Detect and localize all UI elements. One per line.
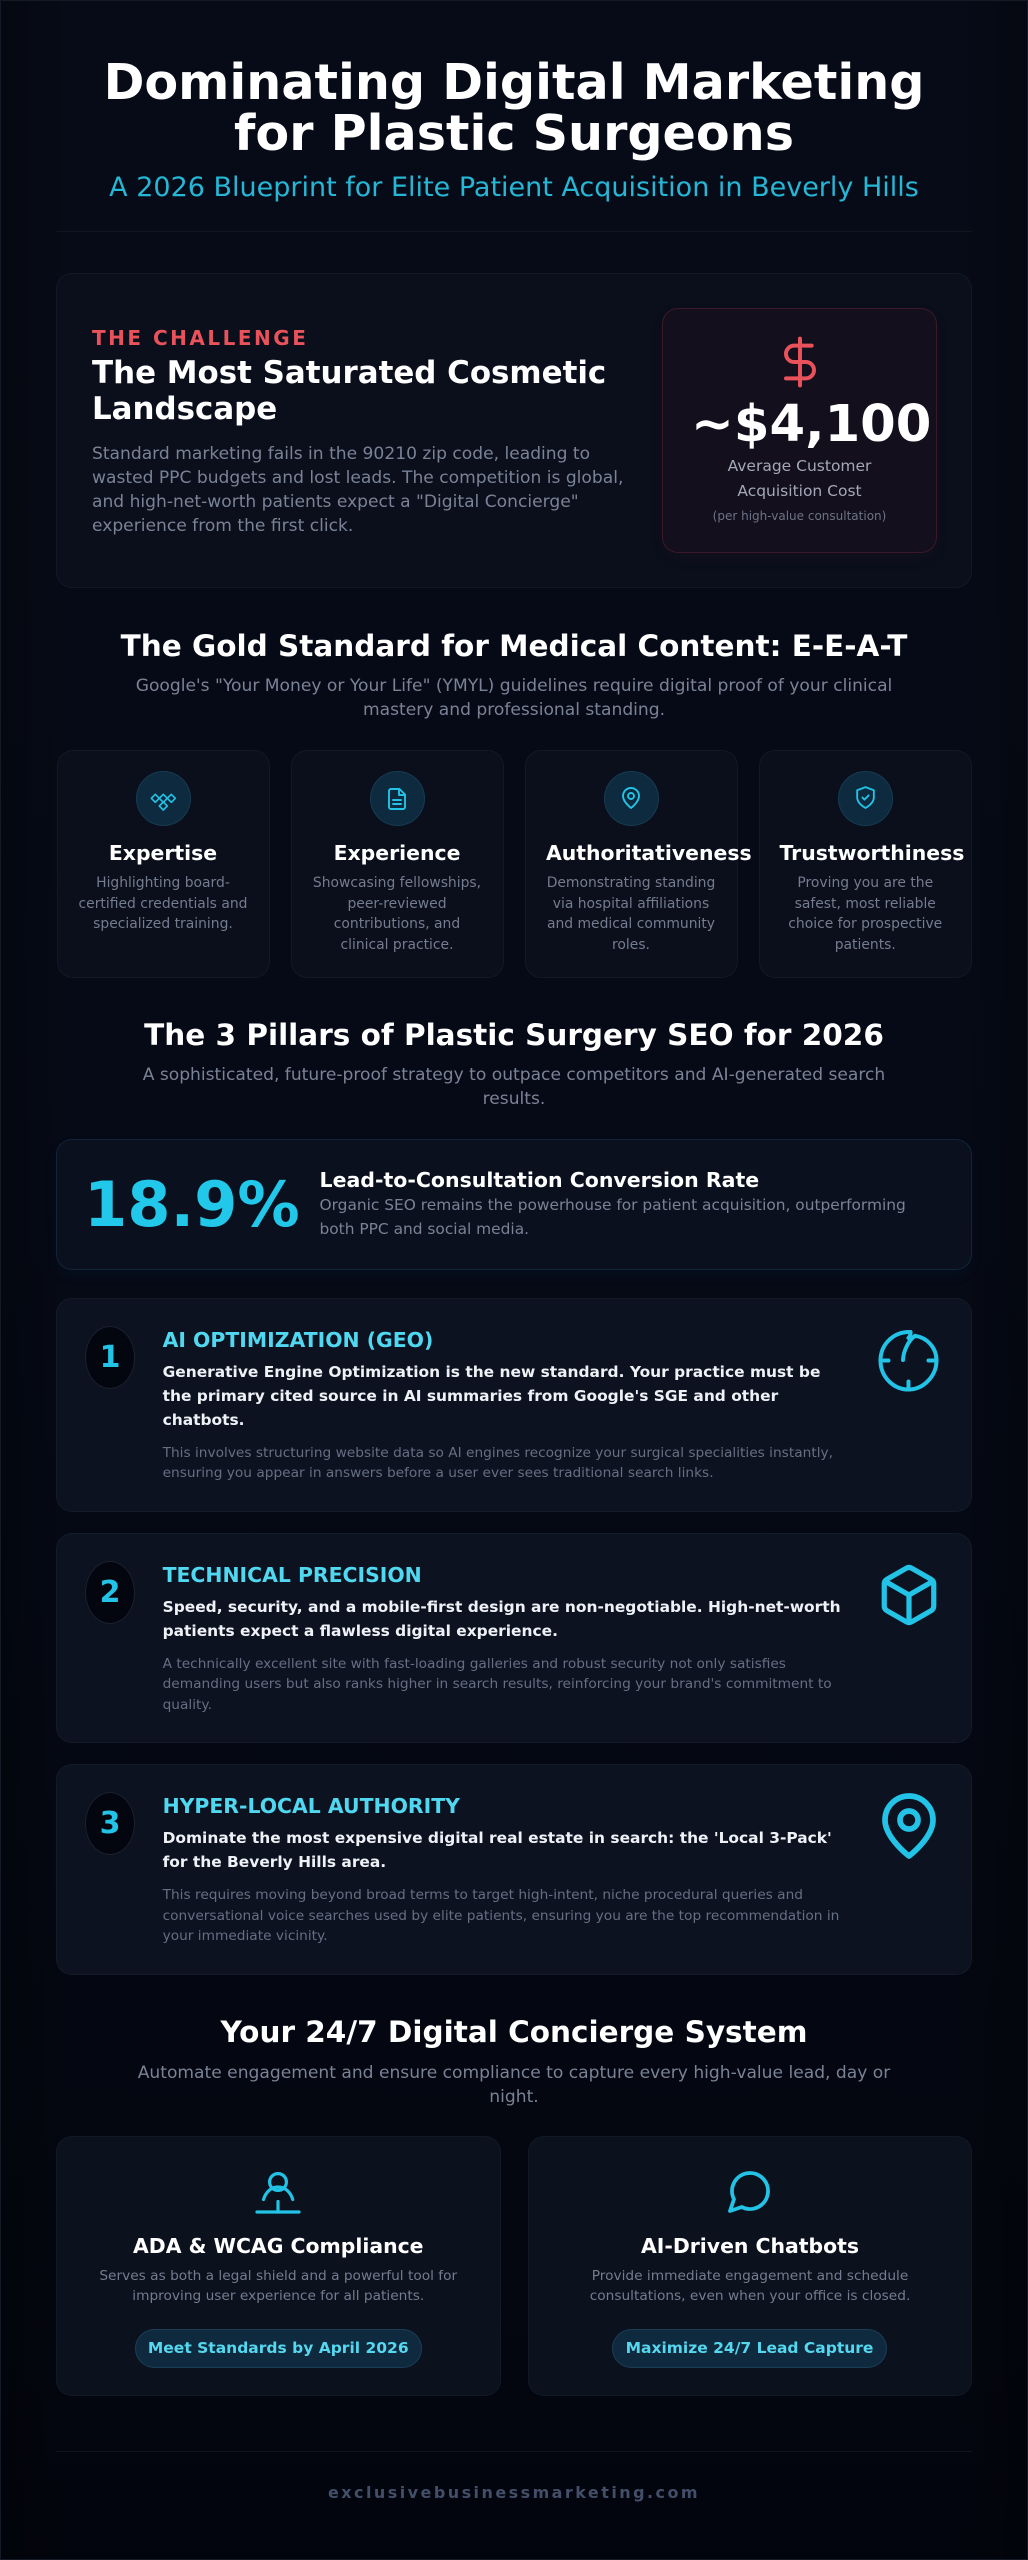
pillar detail: ensuring you appear in answers before a user ever sees traditional search links.	[163, 1465, 714, 1481]
pillar detail	[162, 1887, 839, 1944]
pillar lead	[162, 1363, 820, 1429]
stat label	[728, 457, 872, 500]
card text: safest, most reliable	[795, 896, 936, 912]
panel: ADA compliance	[56, 2136, 500, 2396]
icon: AI gauge	[878, 1330, 938, 1392]
icon: document	[370, 771, 424, 826]
pillar title: HYPER-LOCAL AUTHORITY	[163, 1794, 460, 1818]
subtitle: A 2026 Blueprint for Elite Patient Acquisition in Beverly Hills	[109, 172, 919, 203]
pillar detail	[162, 1444, 833, 1481]
stat note: (per high-value consultation)	[713, 509, 886, 523]
icon: chat bubble	[728, 2171, 770, 2213]
stat label: Acquisition Cost	[737, 482, 862, 500]
panel: authoritativeness	[524, 750, 738, 978]
panel: AI chatbots	[528, 2136, 972, 2396]
pillar lead: for the Beverly Hills area.	[163, 1853, 386, 1871]
icon: diamonds	[136, 771, 191, 826]
title: Dominating Digital Marketing	[104, 52, 924, 110]
pillar lead: the primary cited source in AI summaries from Google's SGE and other	[163, 1387, 778, 1405]
icon: dollar sign	[784, 336, 816, 388]
number badge	[85, 1326, 135, 1389]
panel: pillar 3	[56, 1764, 972, 1975]
pillar detail: quality.	[163, 1697, 212, 1713]
pillar lead: Dominate the most expensive digital real estate in search: the 'Local 3-Pack'	[163, 1829, 832, 1847]
stat value: ~$4,100	[691, 394, 931, 454]
card text: via hospital affiliations	[553, 896, 709, 912]
heading: 3 pillars: The 3 Pillars of Plastic Surgery SEO for 2026	[144, 1018, 884, 1052]
heading: E-E-A-T: The Gold Standard for Medical Content: E-E-A-T	[121, 629, 907, 663]
stat value: 18.9%	[84, 1168, 300, 1241]
pillar detail: This requires moving beyond broad terms to target high-intent, niche procedural queries and	[163, 1887, 803, 1903]
challenge heading	[92, 355, 606, 427]
card title: Authoritativeness	[546, 841, 752, 865]
icon: cube	[882, 1564, 936, 1626]
button: deadline	[135, 2328, 422, 2368]
button: lead capture	[612, 2328, 887, 2368]
number badge	[85, 1792, 135, 1855]
pillar detail: A technically excellent site with fast-loading galleries and robust security not only satisfies	[163, 1656, 786, 1672]
button: deadline: Meet Standards by April 2026	[148, 2338, 409, 2356]
challenge eyebrow: THE CHALLENGE	[92, 326, 308, 350]
pillar detail	[162, 1656, 832, 1713]
card text	[313, 875, 481, 953]
heading: concierge system: Your 24/7 Digital Concierge System	[221, 2015, 807, 2049]
concierge intro text: night.	[489, 2087, 539, 2107]
card title: ADA & WCAG Compliance	[133, 2234, 424, 2258]
card text: contributions, and	[334, 916, 460, 932]
card text: certified credentials and	[79, 896, 247, 912]
challenge heading: The Most Saturated Cosmetic	[92, 355, 606, 391]
title	[104, 52, 924, 162]
E-E-A-T intro text	[136, 676, 892, 720]
card text: specialized training.	[93, 916, 233, 932]
pillar lead: Generative Engine Optimization is the new standard. Your practice must be	[163, 1363, 820, 1381]
card title: Trustworthiness	[780, 841, 964, 865]
number badge	[85, 1561, 135, 1624]
stat text	[320, 1196, 906, 1238]
challenge text	[92, 444, 623, 536]
pillar detail: demanding users but also ranks higher in search results, reinforcing your brand's commitment to	[163, 1676, 832, 1692]
card title: Experience	[334, 841, 460, 865]
card text: and medical community	[547, 916, 715, 932]
challenge text: experience from the first click.	[92, 516, 353, 536]
card text: Highlighting board-	[96, 875, 230, 891]
stat label: Average Customer	[728, 457, 871, 475]
card text	[547, 875, 715, 953]
challenge text: and high-net-worth patients expect a "Digital Concierge"	[92, 492, 579, 512]
number badge: 1	[100, 1340, 120, 1375]
card title: AI-Driven Chatbots	[641, 2234, 859, 2258]
pillars intro text: results.	[483, 1089, 545, 1109]
panel: pillar 1	[56, 1298, 972, 1512]
concierge intro text	[138, 2063, 890, 2107]
panel: conversion rate stat	[56, 1139, 972, 1270]
pillar detail: your immediate vicinity.	[163, 1928, 328, 1944]
pillar title: AI OPTIMIZATION (GEO)	[163, 1328, 433, 1352]
number badge: 3	[100, 1806, 120, 1841]
pillar lead	[162, 1829, 832, 1871]
card text: patients.	[835, 937, 896, 953]
card text: consultations, even when your office is closed.	[590, 2288, 910, 2304]
card text	[590, 2268, 910, 2304]
panel: expertise	[56, 750, 270, 978]
challenge heading: Landscape	[92, 391, 277, 427]
E-E-A-T intro text: mastery and professional standing.	[363, 700, 665, 720]
pillar lead: Speed, security, and a mobile-first design are non-negotiable. High-net-worth	[163, 1598, 841, 1616]
panel: trustworthiness	[758, 750, 972, 978]
number badge: 2	[100, 1575, 120, 1610]
panel: pillar 2	[56, 1533, 972, 1743]
icon: shield	[838, 771, 892, 826]
card text: Serves as both a legal shield and a powerful tool for	[99, 2268, 457, 2284]
card text: roles.	[612, 937, 650, 953]
E-E-A-T intro text: Google's "Your Money or Your Life" (YMYL) guidelines require digital proof of your clinical	[136, 676, 892, 696]
pillar lead	[163, 1598, 841, 1640]
card text: choice for prospective	[788, 916, 942, 932]
concierge intro text: Automate engagement and ensure compliance to capture every high-value lead, day or	[138, 2063, 890, 2083]
pillars intro text: A sophisticated, future-proof strategy to outpace competitors and AI-generated search	[143, 1065, 885, 1085]
icon: accessibility person	[255, 2172, 301, 2214]
pillars intro text	[142, 1065, 885, 1109]
card text: Proving you are the	[797, 875, 933, 891]
card text	[99, 2268, 458, 2304]
pillar lead: chatbots.	[163, 1411, 245, 1429]
pillar title: TECHNICAL PRECISION	[163, 1563, 422, 1587]
icon: location pin	[882, 1793, 936, 1859]
card title: Expertise	[109, 841, 217, 865]
card text	[79, 875, 247, 932]
challenge text: wasted PPC budgets and lost leads. The competition is global,	[92, 468, 623, 488]
panel: experience	[290, 750, 504, 978]
stat title: Lead-to-Consultation Conversion Rate	[320, 1168, 759, 1192]
card text: peer-reviewed	[347, 896, 447, 912]
button: lead capture: Maximize 24/7 Lead Capture	[626, 2338, 873, 2356]
card text: clinical practice.	[340, 937, 454, 953]
card text: Showcasing fellowships,	[313, 875, 481, 891]
challenge text: Standard marketing fails in the 90210 zip code, leading to	[92, 444, 590, 464]
stat text: Organic SEO remains the powerhouse for patient acquisition, outperforming	[320, 1196, 906, 1214]
stat box: acquisition cost	[662, 308, 937, 553]
pillar detail: conversational voice searches used by elite patients, ensuring you are the top recommendation in	[163, 1908, 839, 1924]
card text	[788, 875, 942, 953]
title: for Plastic Surgeons	[234, 104, 794, 162]
icon: location pin	[604, 771, 658, 826]
footer website: exclusivebusinessmarketing.com	[328, 2482, 700, 2502]
card text: improving user experience for all patients.	[132, 2288, 424, 2304]
pillar detail: This involves structuring website data so AI engines recognize your surgical specialities instantly,	[163, 1444, 833, 1460]
card text: Provide immediate engagement and schedule	[592, 2268, 908, 2284]
panel: the challenge	[56, 273, 972, 588]
stat text: both PPC and social media.	[320, 1220, 529, 1238]
card text: Demonstrating standing	[547, 875, 715, 891]
pillar lead: patients expect a flawless digital experience.	[163, 1622, 558, 1640]
